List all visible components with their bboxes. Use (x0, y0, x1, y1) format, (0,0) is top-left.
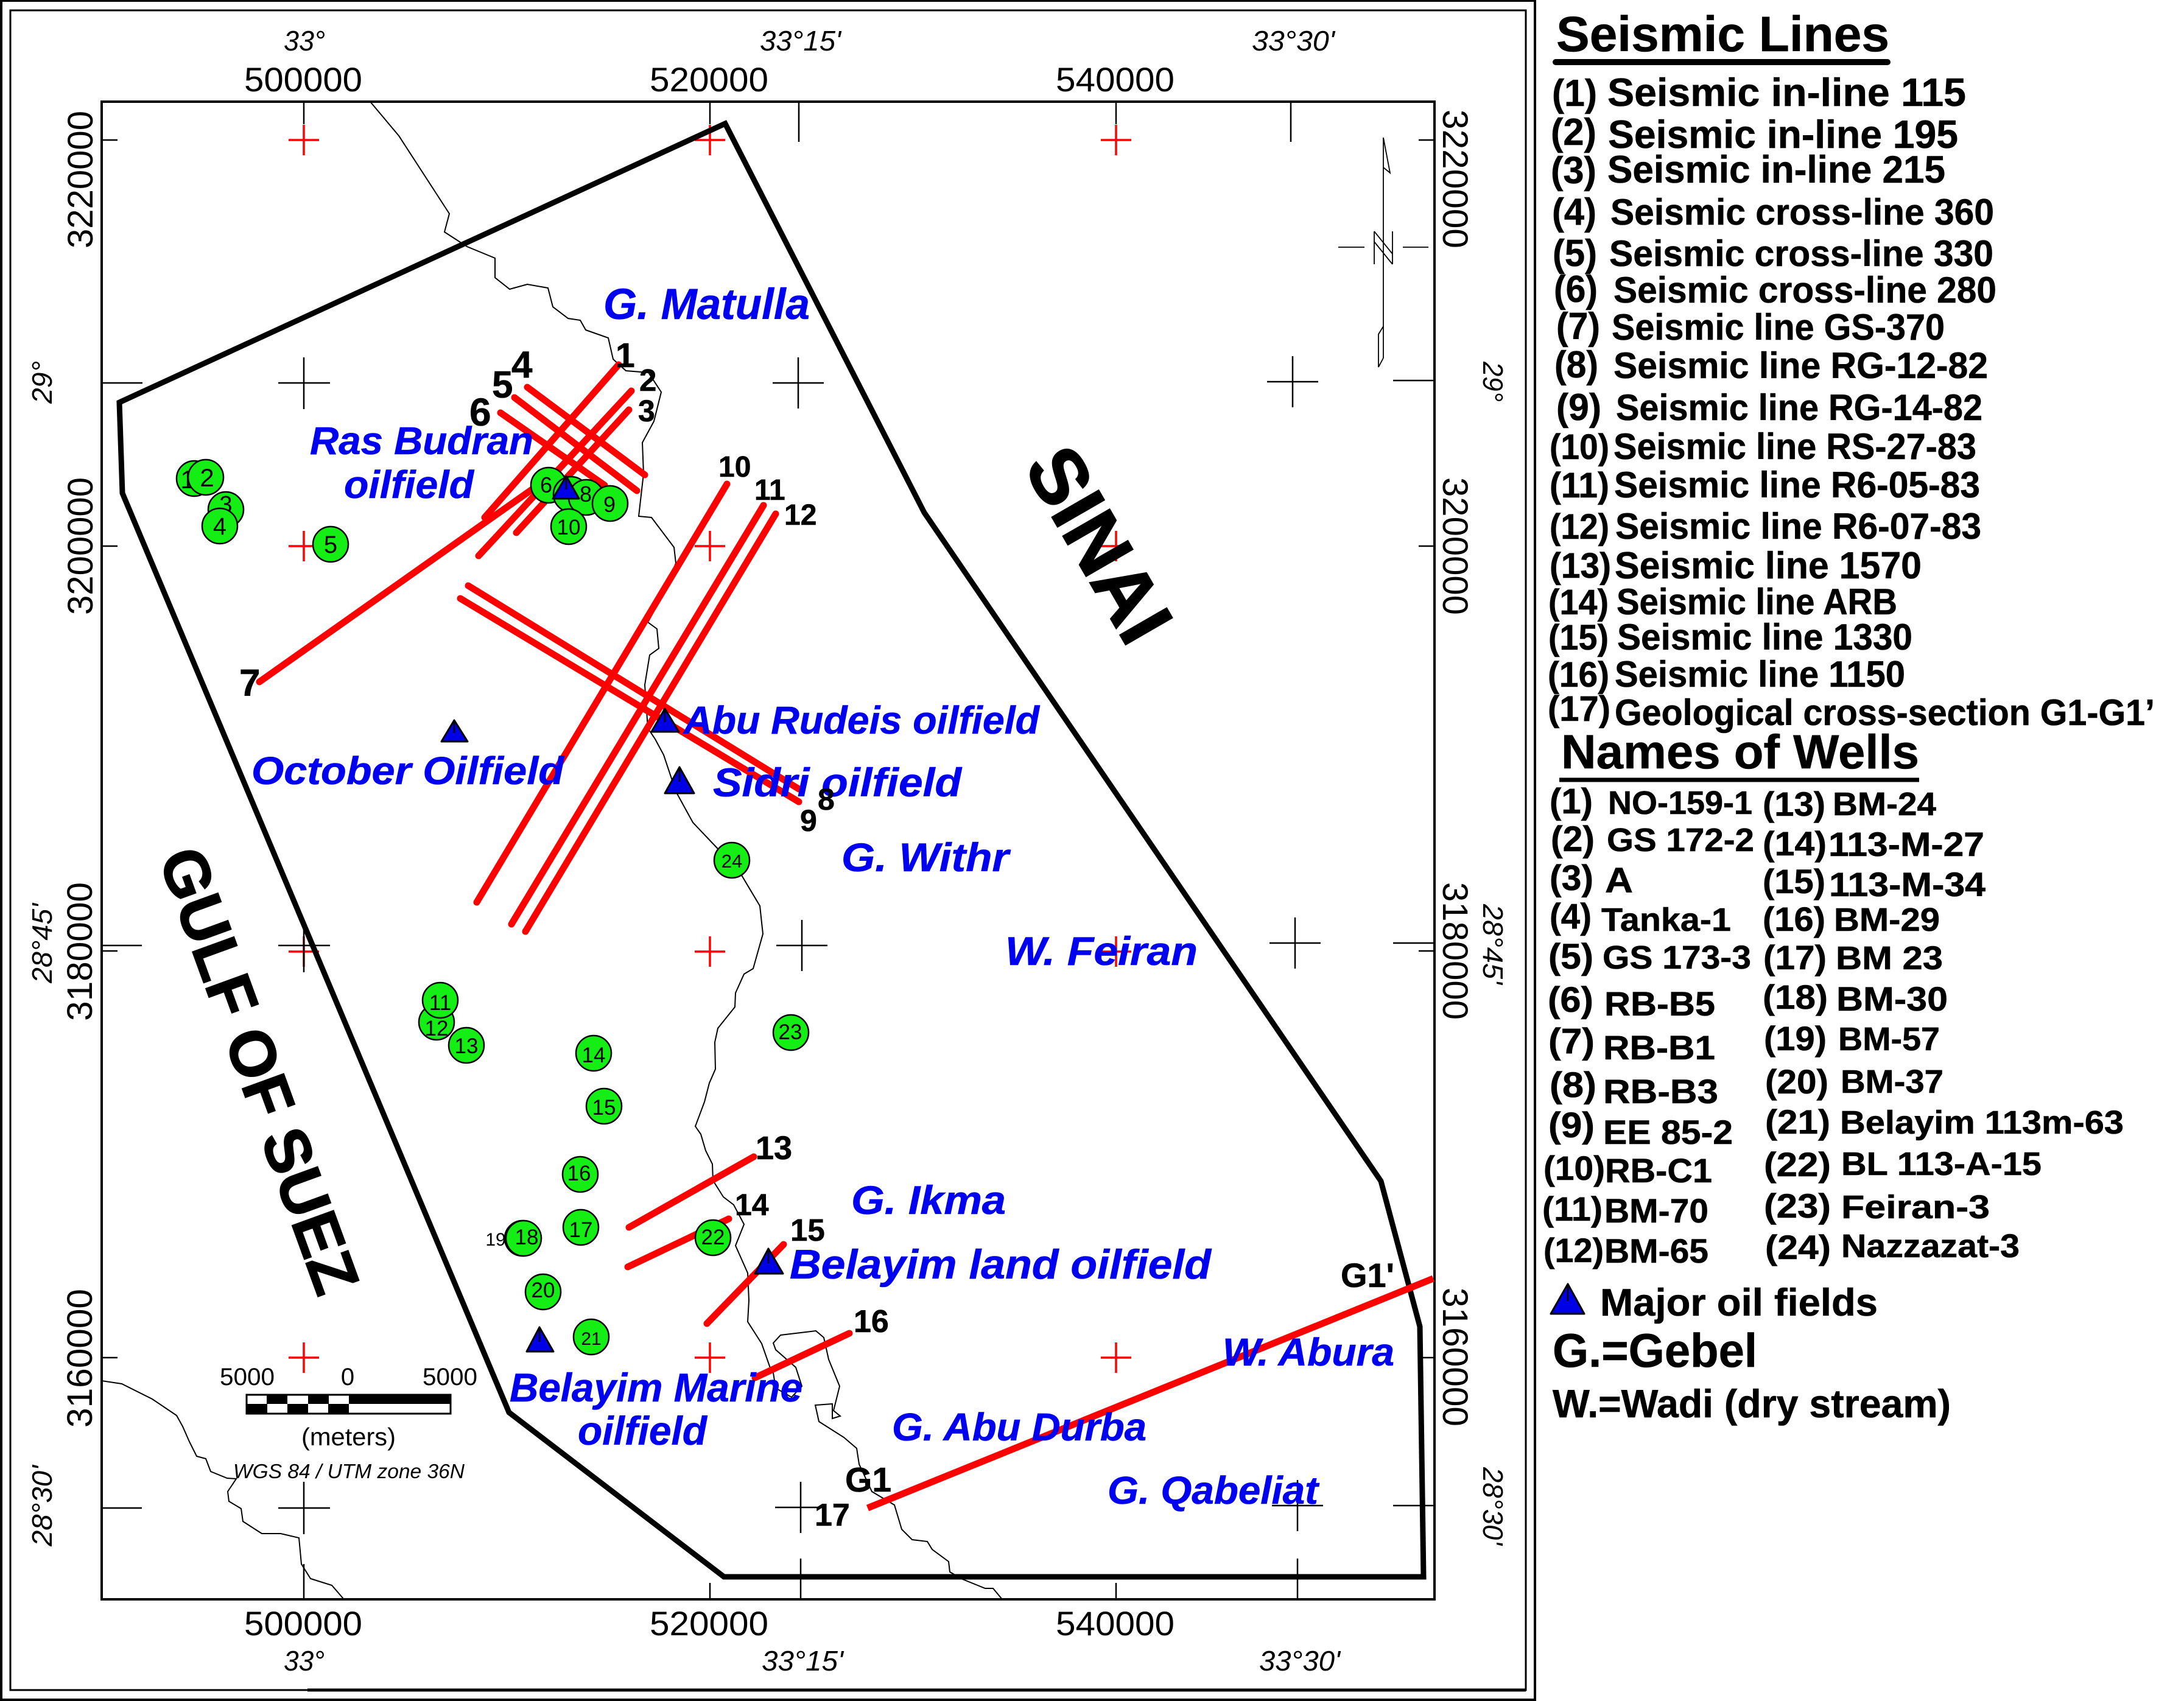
wells list, second column: BL 113-A-15 (1841, 1146, 2042, 1182)
well markers (177, 460, 809, 1355)
top axis labels: 520000 (650, 60, 768, 99)
well 6 (531, 468, 566, 503)
wells list, first column: (10) (1543, 1149, 1605, 1187)
seismic line list: Geological cross-section G1-G1’ (1615, 692, 2155, 733)
seismic line numbers: 2 (639, 363, 656, 398)
wells list, first column: (7) (1548, 1022, 1595, 1061)
seismic line list: Seismic in-line 115 (1607, 70, 1966, 114)
scale bar: 5000 (220, 1364, 275, 1391)
bottom axis labels: 540000 (1056, 1604, 1175, 1643)
coastline (102, 102, 1002, 1599)
seismic line list: Seismic line 1150 (1615, 654, 1905, 695)
left axis labels: 3180000 (60, 882, 100, 1021)
wells list, first column: (8) (1550, 1065, 1596, 1105)
top axis labels: 500000 (244, 60, 362, 99)
seismic line list: Seismic line 1330 (1617, 617, 1912, 658)
triangle: Abu Rudeis (651, 709, 679, 732)
well 24: 24 (722, 850, 742, 872)
well 12: 12 (425, 1017, 448, 1040)
seismic line list: (9) (1556, 387, 1601, 429)
legend: seismic lines (1548, 7, 2155, 733)
wells list, second column: Nazzazat-3 (1841, 1228, 2020, 1264)
blue place and oilfield names: oilfield (578, 1408, 708, 1453)
well 24 (714, 843, 750, 878)
well 20 (525, 1274, 561, 1310)
wells list, first column: GS 173-3 (1603, 939, 1751, 976)
well 21: 21 (581, 1329, 602, 1349)
well 15: 15 (592, 1096, 616, 1120)
well 7: 7 (565, 483, 577, 507)
wells list, first column: (5) (1548, 937, 1593, 977)
seismic line numbers: 14 (735, 1188, 769, 1222)
blue place and oilfield names: Belayim land oilfield (790, 1241, 1212, 1288)
well 19: 19 (485, 1230, 506, 1250)
wells list, first column: RB-C1 (1605, 1151, 1712, 1190)
icon: north arrow (1338, 138, 1428, 367)
wells list, first column: (12) (1543, 1231, 1604, 1269)
wells list, first column: NO-159-1 (1608, 785, 1752, 821)
wells list, first column: (6) (1548, 980, 1593, 1020)
wells list, first column: BM-65 (1604, 1232, 1708, 1270)
well 17: 17 (569, 1218, 592, 1242)
well 17 (563, 1210, 599, 1245)
right axis labels: 3160000 (1435, 1288, 1475, 1426)
seismic line list: Seismic line GS-370 (1612, 307, 1945, 348)
scale bar: (meters) (301, 1423, 396, 1451)
blue place and oilfield names: Belayim Marine (510, 1365, 802, 1410)
seismic line list: Seismic cross-line 330 (1609, 233, 1993, 274)
seismic lines (259, 365, 1433, 1508)
well 13: 13 (455, 1034, 478, 1058)
wells list, second column: (23) (1764, 1187, 1831, 1225)
well 9 (592, 486, 628, 521)
wells list, second column: BM-30 (1836, 980, 1948, 1018)
wells list, second column: BM 23 (1836, 940, 1943, 977)
well 11 (423, 983, 458, 1018)
seismic line list (1548, 70, 2155, 733)
triangle: Belayim Marine (527, 1327, 553, 1352)
seismic line numbers: 4 (511, 344, 533, 386)
blue place and oilfield names: G. Ikma (851, 1177, 1006, 1222)
well 10 (551, 509, 586, 544)
well 8 (569, 480, 604, 515)
well 23 (773, 1015, 809, 1050)
right axis labels: 3200000 (1435, 477, 1475, 615)
blue place and oilfield names: oilfield (344, 463, 475, 507)
seismic line numbers: G1 (845, 1461, 891, 1499)
wells list, first column: (4) (1550, 897, 1592, 936)
wells list, second column (1763, 785, 2124, 1266)
top axis labels: 33°15' (760, 25, 842, 57)
triangle: Ras Budran (553, 476, 579, 499)
seismic line list: Seismic cross-line 280 (1613, 270, 1996, 310)
well 16 (563, 1157, 598, 1192)
seismic line list: (15) (1548, 618, 1609, 658)
seismic line numbers: 3 (638, 394, 655, 428)
wells list, first column: RB-B5 (1604, 984, 1715, 1023)
wells list, second column: BM-57 (1838, 1021, 1940, 1057)
heading: Names of Wells: Names of Wells (1561, 724, 1919, 779)
wells list, second column: BM-29 (1834, 902, 1940, 938)
well 23: 23 (779, 1020, 802, 1044)
wells list, second column: (21) (1765, 1103, 1830, 1141)
blue place and oilfield names: G. Qabeliat (1108, 1468, 1320, 1512)
left axis labels: 3160000 (60, 1289, 100, 1428)
bottom axis labels: 520000 (650, 1604, 768, 1643)
seismic line list: (8) (1554, 344, 1598, 386)
well 2 (188, 460, 223, 495)
wells list, first column: (1) (1550, 782, 1593, 821)
wells list, second column: (22) (1764, 1145, 1831, 1184)
right axis labels: 3180000 (1435, 882, 1475, 1020)
seismic line list: Seismic line 1570 (1615, 545, 1922, 587)
seismic line list: (17) (1548, 689, 1610, 729)
seismic line list: Seismic in-line 215 (1607, 149, 1945, 191)
scale bar (220, 1364, 477, 1482)
seismic line list: Seismic line RS-27-83 (1613, 426, 1976, 467)
well 20: 20 (532, 1278, 555, 1302)
left axis labels: 29° (26, 361, 58, 404)
seismic line numbers (239, 336, 1394, 1533)
seismic line list: (4) (1552, 191, 1596, 233)
well 22: 22 (701, 1226, 725, 1249)
seismic line list: (2) (1551, 111, 1596, 153)
well 10: 10 (557, 516, 580, 539)
seismic line list: Seismic line ARB (1617, 581, 1897, 622)
well 4 (202, 508, 237, 544)
wells list, second column: BM-37 (1841, 1064, 1943, 1100)
seismic line numbers: 17 (815, 1498, 850, 1533)
blue place and oilfield names: G. Matulla (603, 281, 810, 329)
triangle: Sidri (665, 767, 694, 793)
left axis labels: 28°45' (26, 902, 58, 984)
legend: W abbreviation: W.=Wadi (dry stream) (1553, 1381, 1951, 1426)
well 18: 18 (515, 1226, 538, 1249)
seismic line list: (6) (1554, 268, 1598, 310)
well 21 (574, 1319, 609, 1355)
well 3 (208, 492, 244, 527)
seismic line numbers: 13 (756, 1130, 792, 1166)
right axis labels (1435, 110, 1509, 1546)
well 6: 6 (540, 472, 552, 497)
well 9: 9 (603, 492, 616, 517)
seismic line list: (14) (1548, 583, 1609, 622)
map neatline box (102, 102, 1434, 1599)
wells list, second column: (24) (1765, 1228, 1831, 1266)
seismic line list: (12) (1550, 507, 1609, 547)
wells list, second column: (20) (1765, 1062, 1828, 1101)
wells list, first column: (9) (1548, 1106, 1595, 1145)
well 8: 8 (580, 482, 592, 507)
bottom axis labels: 33° (284, 1645, 325, 1677)
well 3: 3 (219, 492, 233, 517)
blue place and oilfield names: Sidri oilfield (713, 760, 963, 805)
top axis labels (244, 25, 1336, 99)
seismic line numbers: 15 (790, 1213, 825, 1247)
right axis labels: 29° (1477, 361, 1509, 402)
well 15 (586, 1089, 622, 1124)
right axis labels: 28°30' (1477, 1467, 1509, 1546)
wells list, second column: (13) (1763, 785, 1825, 823)
geographic graticule crosses (278, 356, 1323, 1534)
seismic line numbers: G1' (1341, 1256, 1394, 1294)
seismic line numbers: 7 (239, 662, 260, 704)
wells list, second column: (18) (1763, 978, 1828, 1016)
left axis labels: 28°30' (26, 1464, 58, 1547)
well 1: 1 (180, 465, 195, 494)
well 13 (449, 1028, 484, 1063)
well 12 (419, 1005, 454, 1040)
outer map frame (1, 1, 1535, 1700)
seismic line list: (3) (1551, 150, 1596, 192)
top axis labels: 33° (284, 25, 325, 57)
wells list, second column: (14) (1763, 824, 1827, 863)
wells list, first column: BM-70 (1604, 1191, 1708, 1230)
seismic line list: (10) (1550, 427, 1609, 467)
blue place and oilfield names (251, 281, 1394, 1512)
seismic line numbers: 8 (818, 782, 835, 816)
seismic line list: (13) (1550, 546, 1611, 586)
wells list, second column: (17) (1763, 938, 1827, 977)
UTM grid crosses (289, 125, 1131, 1373)
heading: Seismic Lines: Seismic Lines (1556, 7, 1889, 62)
right axis labels: 3220000 (1435, 110, 1475, 248)
scale bar: 5000 (423, 1364, 477, 1391)
bottom axis labels (244, 1604, 1341, 1677)
legend: G abbreviation: G.=Gebel (1553, 1324, 1757, 1377)
wells list, first column: RB-B3 (1603, 1072, 1718, 1110)
seismic line list: (7) (1556, 306, 1600, 348)
blue place and oilfield names: G. Abu Durba (892, 1405, 1146, 1449)
bottom axis labels: 33°30' (1259, 1645, 1341, 1677)
well 4: 4 (213, 513, 226, 540)
bottom axis labels: 500000 (244, 1604, 362, 1643)
seismic line numbers: 6 (469, 390, 491, 434)
seismic line list: (5) (1553, 233, 1597, 275)
wells list, first column: Tanka-1 (1601, 902, 1731, 938)
triangle: Belayim land (755, 1249, 783, 1274)
seismic line numbers: 10 (718, 451, 751, 483)
well 22 (695, 1220, 731, 1255)
label: Gulf of Suez: GULF OF SUEZ (145, 838, 373, 1303)
wells list, first column: (11) (1542, 1190, 1603, 1228)
wells list, first column: EE 85-2 (1603, 1113, 1733, 1151)
study area boundary (119, 124, 1424, 1577)
seismic line list: (16) (1548, 655, 1609, 695)
wells list, first column: A (1605, 861, 1633, 900)
seismic line list: Seismic line R6-05-83 (1614, 465, 1980, 505)
scale bar: WGS 84 / UTM zone 36N (233, 1460, 465, 1482)
wells list, first column: (3) (1550, 858, 1593, 898)
major oil field markers (441, 476, 783, 1352)
wells list, second column: (16) (1763, 900, 1825, 938)
seismic line numbers: 16 (854, 1304, 889, 1339)
axis ticks (102, 102, 1434, 1599)
well 5 (313, 527, 348, 562)
left axis labels: 3220000 (61, 111, 100, 248)
well 18 (506, 1221, 541, 1256)
seismic line numbers: 9 (800, 804, 817, 838)
well 11: 11 (429, 991, 451, 1015)
seismic line list: Seismic in-line 195 (1608, 112, 1958, 156)
seismic line numbers: 12 (784, 499, 816, 531)
top axis labels: 33°30' (1252, 25, 1336, 57)
blue place and oilfield names: G. Withr (841, 835, 1011, 880)
well 5: 5 (324, 531, 337, 558)
seismic line numbers: 11 (754, 474, 785, 507)
seismic line numbers: 1 (616, 336, 635, 375)
blue place and oilfield names: October Oilfield (251, 749, 565, 793)
bottom axis labels: 33°15' (762, 1645, 844, 1677)
seismic line list: Seismic line RG-14-82 (1616, 387, 1982, 428)
wells list, first column: RB-B1 (1603, 1028, 1715, 1067)
well 16: 16 (567, 1162, 591, 1185)
wells list, first column: GS 172-2 (1607, 822, 1754, 858)
scale bar: 0 (341, 1364, 354, 1391)
well 1 (177, 461, 212, 496)
left axis labels (26, 111, 100, 1547)
wells list, second column: 113-M-27 (1828, 825, 1984, 863)
seismic line list: Seismic line R6-07-83 (1615, 506, 1981, 547)
wells list, second column: (19) (1764, 1019, 1827, 1057)
blue place and oilfield names: W. Abura (1223, 1330, 1394, 1374)
seismic line list: Seismic cross-line 360 (1610, 192, 1994, 233)
wells list, second column: (15) (1763, 862, 1825, 900)
well 7 (553, 477, 589, 512)
wells list, second column: BM-24 (1833, 786, 1936, 822)
well 14 (576, 1036, 611, 1071)
wells list, second column: 113-M-34 (1829, 865, 1986, 903)
label: SINAI: SINAI (1008, 432, 1189, 658)
seismic line list: Seismic line RG-12-82 (1613, 345, 1988, 386)
right axis labels: 28°45' (1477, 903, 1509, 986)
well 2: 2 (200, 463, 214, 492)
blue place and oilfield names: Abu Rudeis oilfield (683, 698, 1041, 742)
blue place and oilfield names: W. Feiran (1005, 928, 1198, 973)
legend: major oil fields: Major oil fields (1600, 1282, 1878, 1324)
seismic line list: (11) (1550, 466, 1609, 505)
triangle: October (441, 720, 468, 742)
wells list, second column: Belayim 113m-63 (1840, 1104, 2124, 1141)
wells list, second column: Feiran-3 (1841, 1189, 1990, 1226)
top axis labels: 540000 (1056, 60, 1175, 99)
blue place and oilfield names: Ras Budran (310, 419, 533, 463)
wells list, first column (1542, 782, 1754, 1270)
wells list, first column: (2) (1551, 819, 1595, 859)
legend: names of wells (1542, 724, 2124, 1270)
well 14: 14 (582, 1043, 605, 1067)
seismic line numbers: 5 (492, 364, 513, 406)
well 19 (485, 1221, 540, 1256)
seismic line list: (1) (1552, 72, 1597, 114)
left axis labels: 3200000 (61, 477, 100, 615)
